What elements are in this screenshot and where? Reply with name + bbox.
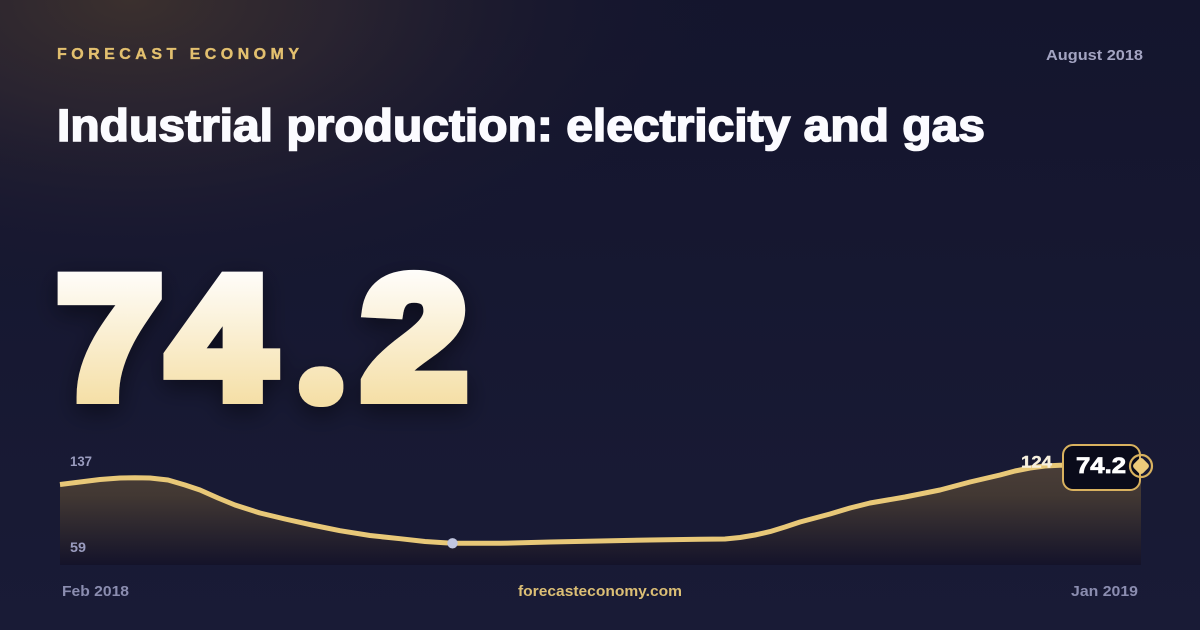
current value callout [1063, 445, 1140, 490]
axis max label: 137 [70, 454, 92, 469]
date: August 2018 [1046, 47, 1143, 64]
current value callout: 74.2 [1076, 453, 1126, 478]
end date: Jan 2019 [1071, 584, 1138, 600]
chart area fill [60, 465, 1141, 565]
title: Industrial production: electricity and gas [57, 100, 985, 151]
peak value label: 124 [1021, 454, 1053, 472]
area chart [60, 445, 1152, 565]
headline value [56, 270, 469, 416]
chart line [60, 465, 1141, 543]
headline value: 2 [362, 242, 467, 434]
current point marker [1130, 455, 1152, 477]
start date: Feb 2018 [62, 584, 129, 600]
headline value: . [318, 368, 325, 394]
headline value: 4 [168, 242, 274, 434]
axis min label: 59 [70, 540, 86, 555]
headline value: 7 [57, 242, 162, 434]
minimum point marker [447, 538, 458, 548]
source url: forecasteconomy.com [518, 584, 682, 600]
brand label: FORECAST ECONOMY [57, 46, 299, 63]
